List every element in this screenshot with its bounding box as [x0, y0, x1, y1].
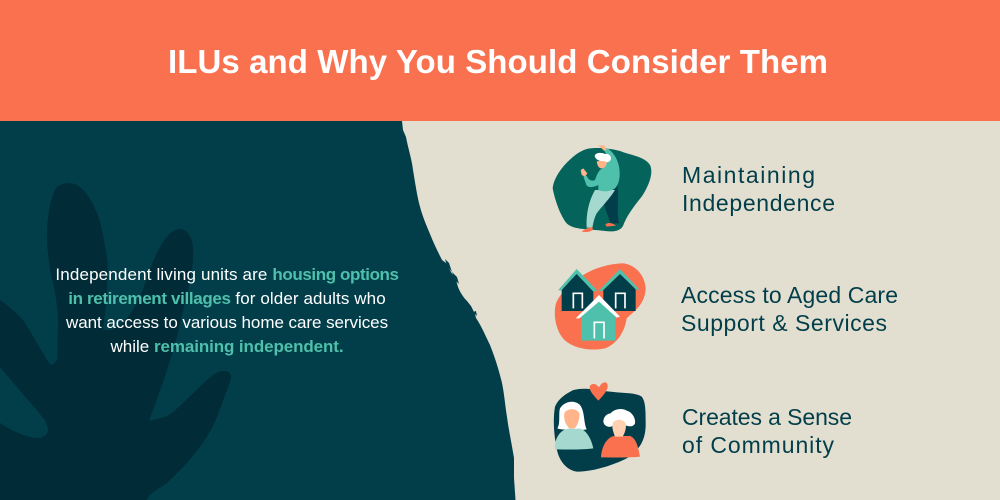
label: creates a sense of community: Creates a Sense: [682, 404, 852, 430]
icon: three houses: [555, 263, 646, 350]
decoration: hand silhouette: [0, 183, 231, 500]
label: access to aged care: Access to Aged Care: [681, 282, 898, 308]
label: maintaining independence: [682, 162, 835, 216]
label: maintaining independence: Maintaining: [682, 162, 815, 188]
panel: title banner: [0, 0, 1000, 121]
text block: intro paragraph: in retirement villages for older adults who: [68, 289, 386, 308]
title: ILUs and Why You Should Consider Them: [168, 43, 828, 80]
label: maintaining independence: Independence: [682, 190, 835, 216]
label: creates a sense of community: [682, 404, 852, 458]
text block: intro paragraph: [55, 265, 399, 356]
label: creates a sense of community: of Community: [682, 432, 834, 458]
text block: intro paragraph: while remaining independent.: [109, 337, 344, 356]
label: access to aged care: [681, 282, 898, 336]
text block: intro paragraph: want access to various home care services: [65, 313, 388, 332]
text block: intro paragraph: Independent living units are housing options: [55, 265, 399, 284]
label: access to aged care: Support & Services: [681, 310, 887, 336]
icon: independent person dancing: [553, 145, 651, 232]
panel: dark left panel with brushed edge: [0, 121, 516, 500]
icon: two friends with heart: [554, 382, 646, 472]
